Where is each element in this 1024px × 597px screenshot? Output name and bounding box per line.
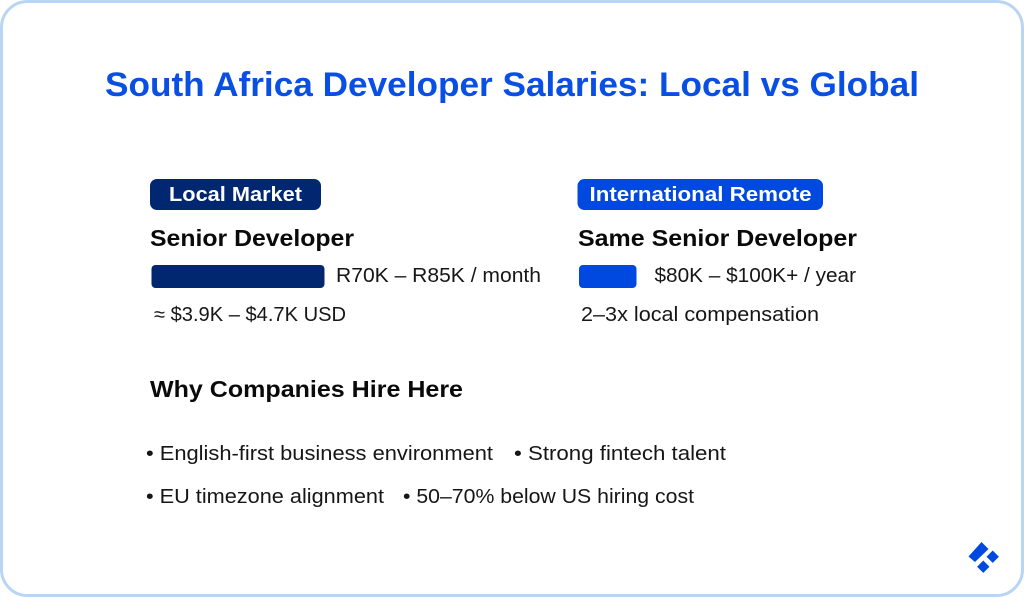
label: local salary range: R70K – R85K / month: [336, 265, 541, 287]
panel: local market: [150, 179, 541, 326]
reason: fintech talent: • Strong fintech talent: [514, 443, 726, 465]
reason: EU timezone: • EU timezone alignment: [146, 486, 384, 508]
badge: local market: Local Market: [169, 184, 302, 206]
heading: senior developer: Senior Developer: [150, 225, 354, 251]
bar: remote salary: [579, 265, 636, 288]
panel: international remote: [578, 179, 857, 326]
heading: same senior developer: Same Senior Developer: [578, 225, 857, 251]
bar: local salary: [152, 265, 324, 288]
title: South Africa Developer Salaries: Local vs Global: [105, 66, 919, 104]
label: USD equivalent: ≈ $3.9K – $4.7K USD: [154, 304, 346, 326]
reason: hiring cost: • 50–70% below US hiring cost: [403, 486, 694, 508]
label: remote salary range: $80K – $100K+ / year: [654, 265, 856, 287]
label: compensation multiple: 2–3x local compensation: [581, 304, 819, 326]
heading: why companies hire here: Why Companies Hire Here: [150, 376, 463, 402]
badge: international remote: [578, 179, 823, 210]
badge: international remote: International Remote: [590, 184, 812, 206]
list: reasons to hire: [146, 443, 726, 508]
badge: local market: [150, 179, 321, 210]
icon: logo mark: [968, 542, 999, 573]
reason: English-first: • English-first business environment: [146, 443, 493, 465]
